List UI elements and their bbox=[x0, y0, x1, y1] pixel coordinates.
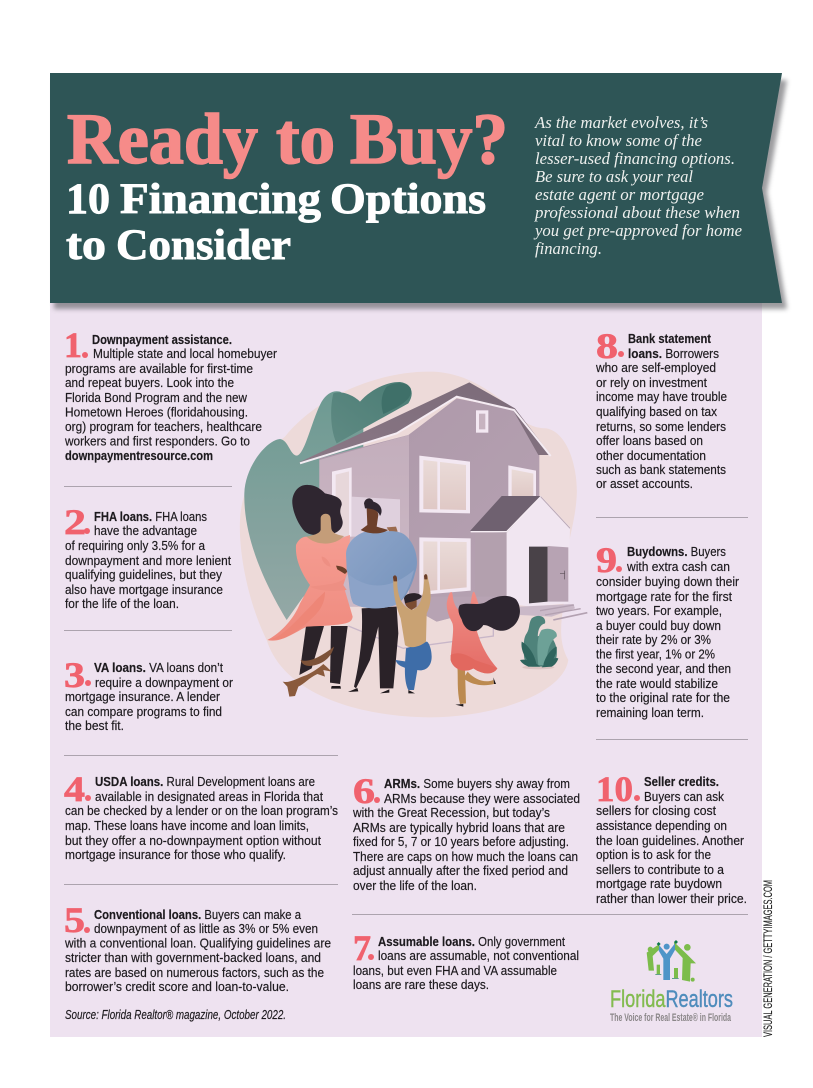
number 10: 10 bbox=[596, 769, 633, 809]
item 9: buydowns: consider buying down their bbox=[596, 574, 740, 589]
item 5: conventional loans: downpayment of as little as 3% or 5% even bbox=[94, 921, 318, 936]
title: Ready to Buy?: Ready bbox=[67, 99, 258, 179]
item 10: seller credits: Buyers can ask bbox=[644, 789, 724, 804]
title: Ready to Buy? bbox=[67, 99, 508, 179]
number 6 bbox=[353, 771, 380, 811]
item 9: buydowns: two years. For example, bbox=[596, 603, 722, 618]
item 7: assumable loans: loans, but even FHA and VA assumable bbox=[353, 963, 557, 978]
item 9: buydowns: to the original rate for the bbox=[596, 690, 730, 705]
intro paragraph: estate agent or mortgage bbox=[535, 185, 704, 204]
item 10: seller credits: rather than lower their price. bbox=[596, 891, 747, 906]
item 9: buydowns bbox=[596, 540, 740, 720]
item 5: conventional loans: rates are based on numerous factors, such as the bbox=[65, 965, 324, 980]
boy bbox=[393, 574, 432, 693]
bush bbox=[520, 616, 558, 669]
intro paragraph: financing. bbox=[535, 239, 602, 258]
item 5: conventional loans bbox=[64, 900, 331, 994]
photo credit: VISUAL GENERATION / GETTYIMAGES.COM bbox=[763, 880, 775, 1037]
subtitle: Financing bbox=[120, 176, 322, 223]
number 5: 5 bbox=[64, 900, 85, 940]
item 9: buydowns: the first year, 1% or 2% bbox=[596, 646, 715, 662]
item 2: FHA loans: FHA loans. FHA loans bbox=[94, 509, 207, 524]
item 2: FHA loans: of requiring only 3.5% for a bbox=[65, 538, 206, 553]
item 10: seller credits bbox=[596, 769, 747, 906]
item 6: ARMs: over the life of the loan. bbox=[353, 878, 477, 893]
logo icon: houses and people bbox=[647, 940, 696, 982]
item 2: FHA loans: also have mortgage insurance bbox=[65, 582, 223, 597]
item 10: seller credits: option is to ask for the bbox=[596, 847, 711, 862]
item 6: ARMs: ARMs. Some buyers shy away from bbox=[384, 776, 570, 791]
item 9: buydowns: with extra cash can bbox=[626, 559, 730, 574]
item 3: VA loans: mortgage insurance. A lender bbox=[65, 689, 221, 704]
item 6: ARMs: fixed for 5, 7 or 10 years before adjusting. bbox=[353, 834, 569, 849]
item 8: bank statement loans: Bank statement bbox=[628, 331, 712, 346]
item 4: USDA loans bbox=[64, 769, 338, 862]
intro paragraph: As the market evolves, it’s bbox=[534, 113, 708, 132]
number 8 bbox=[596, 326, 624, 366]
item 4: USDA loans: map. These loans have income and loan limits, bbox=[65, 818, 309, 833]
number 3: 3 bbox=[64, 655, 85, 695]
subtitle bbox=[66, 176, 486, 269]
item 7: assumable loans bbox=[353, 928, 579, 992]
item 9: buydowns: a buyer could buy down bbox=[596, 618, 721, 633]
subtitle: Consider bbox=[116, 222, 291, 269]
background blob bbox=[240, 372, 577, 717]
item 9: buydowns: remaining loan term. bbox=[596, 705, 704, 720]
item 10: seller credits: the loan guidelines. Another bbox=[596, 833, 745, 848]
item 6: ARMs bbox=[352, 771, 580, 893]
item 10: seller credits: assistance depending on bbox=[596, 818, 727, 833]
intro paragraph: professional about these when bbox=[534, 203, 740, 222]
number 2: 2 bbox=[64, 502, 86, 542]
Florida Realtors logo bbox=[610, 940, 733, 1024]
intro paragraph: vital to know some of the bbox=[535, 131, 702, 150]
item 9: buydowns: the rate would stabilize bbox=[596, 676, 718, 691]
number 4: 4 bbox=[64, 769, 85, 809]
house bbox=[298, 382, 587, 648]
title: Ready to Buy?: to bbox=[276, 99, 335, 179]
number 8: 8 bbox=[596, 326, 618, 366]
item 2: FHA loans: qualifying guidelines, but they bbox=[65, 567, 222, 582]
item 1: downpayment assistance: and repeat buyers. Look into the bbox=[65, 375, 234, 390]
item 8: bank statement loans: such as bank statements bbox=[596, 462, 726, 477]
item 2: FHA loans: downpayment and more lenient bbox=[65, 553, 231, 568]
item 1: downpayment assistance: org) program for teachers, healthcare bbox=[65, 419, 262, 434]
girl bbox=[447, 592, 520, 707]
intro paragraph: lesser-used financing options. bbox=[535, 149, 735, 168]
item 8: bank statement loans: other documentation bbox=[596, 448, 706, 463]
item 10: seller credits: sellers for closing cost bbox=[596, 803, 716, 818]
item 1: downpayment assistance: Multiple state and local homebuyer bbox=[93, 346, 278, 361]
intro paragraph bbox=[533, 113, 742, 258]
item 5: conventional loans: Conventional loans. Buyers can make a bbox=[94, 907, 302, 922]
item 4: USDA loans: but they offer a no-downpayment option without bbox=[65, 833, 321, 848]
item 3: VA loans bbox=[64, 655, 234, 733]
item 1: downpayment assistance: programs are available for first-time bbox=[65, 361, 253, 376]
item 5: conventional loans: borrower’s credit score and loan-to-value. bbox=[65, 979, 289, 994]
item 1: downpayment assistance: workers and first responders. Go to bbox=[64, 434, 250, 448]
subtitle: Options bbox=[330, 176, 486, 223]
item 8: bank statement loans: income may have trouble bbox=[596, 389, 727, 404]
item 7: assumable loans: loans are assumable, not conventional bbox=[378, 948, 579, 963]
item 9: buydowns: the second year, and then bbox=[596, 661, 731, 676]
title: Ready to Buy?: Buy? bbox=[350, 99, 508, 179]
item 8: bank statement loans: returns, so some lenders bbox=[596, 419, 726, 434]
item 4: USDA loans: available in designated areas in Florida that bbox=[95, 789, 323, 804]
banner shadow bbox=[54, 80, 787, 309]
item 1: downpayment assistance: Downpayment assistance. bbox=[92, 332, 232, 347]
item 10: seller credits: Seller credits. bbox=[644, 774, 719, 789]
intro paragraph: you get pre-approved for home bbox=[533, 221, 742, 240]
item 2: FHA loans bbox=[64, 502, 231, 611]
item 10: seller credits: mortgage rate buydown bbox=[596, 876, 722, 891]
window: upper centre bbox=[419, 456, 470, 513]
header banner bbox=[50, 73, 782, 303]
item 3: VA loans: the best fit. bbox=[65, 718, 124, 733]
lavender background panel bbox=[50, 303, 762, 1037]
item 8: bank statement loans: who are self-employed bbox=[595, 360, 716, 375]
item 2: FHA loans: for the life of the loan. bbox=[65, 596, 179, 611]
mother bbox=[267, 485, 353, 689]
item 6: ARMs: ARMs are typically hybrid loans that are bbox=[353, 820, 565, 835]
item 2: FHA loans: have the advantage bbox=[94, 523, 197, 538]
dog bbox=[283, 647, 334, 697]
number 2 bbox=[64, 502, 90, 542]
item 9: buydowns: Buydowns. Buyers bbox=[627, 544, 726, 559]
item 8: bank statement loans: loans. Borrowers bbox=[628, 346, 719, 361]
item 7: assumable loans: Assumable loans. Only government bbox=[378, 934, 565, 949]
illustration: family in front of house bbox=[240, 372, 587, 717]
leaves bbox=[244, 382, 412, 620]
porch bbox=[470, 496, 587, 620]
logo wordmark: FloridaRealtors bbox=[610, 986, 733, 1013]
item 6: ARMs: ARMs because they were associated bbox=[384, 791, 580, 806]
item 4: USDA loans: can be checked by a lender or on the loan program’s bbox=[65, 803, 338, 818]
number 9 bbox=[596, 540, 622, 580]
item 3: VA loans: require a downpayment or bbox=[95, 675, 234, 690]
item 4: USDA loans: mortgage insurance for those who qualify. bbox=[65, 847, 286, 862]
item 5: conventional loans: with a conventional loan. Qualifying guidelines are bbox=[64, 936, 331, 950]
number 1: 1 bbox=[64, 325, 82, 365]
number 6: 6 bbox=[353, 771, 375, 811]
subtitle: 10 bbox=[66, 176, 110, 223]
item 1: downpayment assistance: Florida Bond Program and the new bbox=[65, 390, 248, 405]
item 6: ARMs: with the Great Recession, but today’s bbox=[352, 805, 550, 820]
item 10: seller credits: sellers to contribute to a bbox=[596, 862, 725, 877]
item 1: downpayment assistance: Hometown Heroes (floridahousing. bbox=[65, 404, 248, 420]
number 5 bbox=[64, 900, 90, 940]
item 8: bank statement loans bbox=[595, 326, 727, 491]
item 6: ARMs: There are caps on how much the loans can bbox=[353, 849, 578, 864]
item 1: downpayment assistance bbox=[64, 325, 278, 463]
item 8: bank statement loans: qualifying based on tax bbox=[596, 404, 717, 419]
item 7: assumable loans: loans are rare these days. bbox=[353, 977, 489, 992]
source note: Source: Florida Realtor® magazine, October 2022. bbox=[65, 1007, 286, 1022]
item 1: downpayment assistance: downpaymentresource.com bbox=[65, 448, 213, 463]
window: lower centre bbox=[419, 537, 471, 595]
subtitle: to bbox=[66, 222, 106, 269]
item 3: VA loans: can compare programs to find bbox=[65, 704, 222, 719]
item 9: buydowns: mortgage rate for the first bbox=[596, 589, 732, 604]
window: upper right bbox=[508, 465, 536, 498]
father bbox=[346, 498, 417, 693]
item 9: buydowns: their rate by 2% or 3% bbox=[596, 632, 711, 647]
item 3: VA loans: VA loans. VA loans don’t bbox=[94, 660, 223, 675]
logo tagline: The Voice for Real Estate® in Florida bbox=[610, 1012, 732, 1024]
number 7: 7 bbox=[353, 928, 371, 968]
intro paragraph: Be sure to ask your real bbox=[535, 167, 693, 186]
window: upper left bbox=[332, 467, 352, 537]
window: attic bbox=[476, 410, 488, 433]
number 9: 9 bbox=[596, 540, 617, 580]
item 8: bank statement loans: offer loans based on bbox=[596, 433, 703, 448]
balcony glass bbox=[352, 497, 400, 537]
item 4: USDA loans: USDA loans. Rural Development loans are bbox=[95, 774, 315, 789]
number 4 bbox=[64, 769, 91, 809]
item 5: conventional loans: stricter than with government-backed loans, and bbox=[65, 950, 321, 965]
number 3 bbox=[64, 655, 91, 695]
item 8: bank statement loans: or rely on investment bbox=[596, 375, 707, 390]
item 6: ARMs: adjust annually after the fixed period and bbox=[353, 863, 568, 878]
item 8: bank statement loans: or asset accounts. bbox=[596, 476, 693, 491]
